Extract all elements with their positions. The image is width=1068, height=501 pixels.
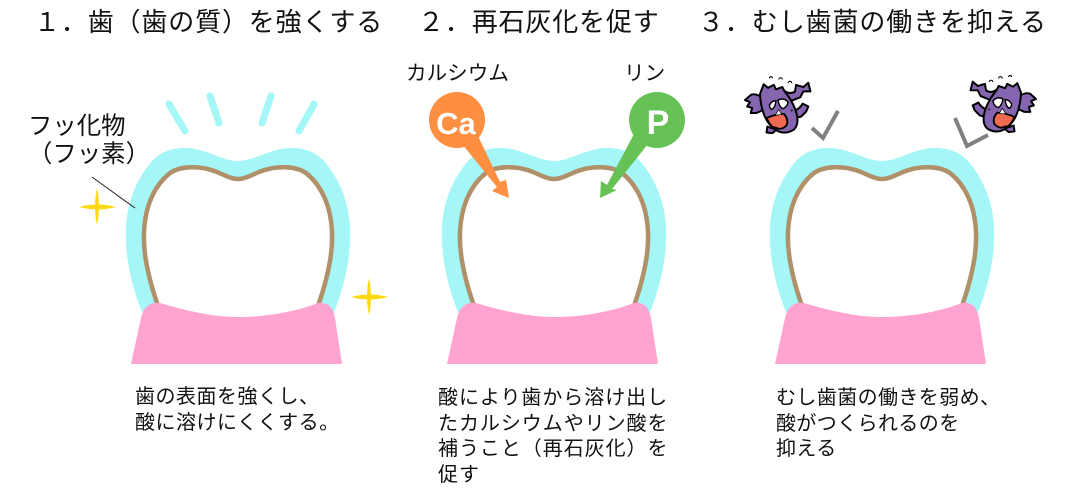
gum: [447, 303, 658, 364]
icon: cavity germ right: [971, 76, 1036, 132]
icon: check mark left: [812, 111, 838, 138]
text: step 2 description: たカルシウムやリン酸を: [438, 412, 668, 435]
icon: calcium arrow: Ca: [436, 106, 477, 141]
text: step 2 description: 酸により歯から溶け出し: [438, 386, 668, 409]
label: fluoride: フッ化物: [28, 113, 126, 140]
enamel coating: [770, 148, 994, 312]
panel: tooth 2: [442, 148, 666, 364]
panel: tooth 3: [770, 148, 994, 364]
text: step 3 description: むし歯菌の働きを弱め、: [776, 386, 1000, 409]
text: step 1 description: 歯の表面を強くし、: [135, 385, 320, 408]
text: step 2 description: 補うこと（再石灰化）を: [438, 437, 668, 460]
tooth dentin outline: [460, 167, 648, 306]
label: fluoride: [28, 113, 150, 168]
icon: sparkle right: [351, 278, 388, 315]
title: step 3: ３．むし歯菌の働きを抑える: [698, 7, 1047, 37]
tooth interior: [460, 167, 648, 325]
gum: [131, 303, 342, 364]
icon: sparkle left: [79, 188, 116, 225]
label: calcium: カルシウム: [406, 62, 509, 85]
tooth interior: [788, 167, 976, 325]
text: step 1 description: 酸に溶けにくくする。: [135, 411, 340, 434]
icon: phosphorus arrow: P: [647, 104, 669, 142]
tooth dentin outline: [788, 167, 976, 306]
text: step 3 description: 酸がつくられるのを: [776, 412, 960, 435]
title: step 2: ２．再石灰化を促す: [418, 7, 660, 37]
shine rays: [169, 96, 314, 131]
text: step 1 description: [135, 385, 340, 434]
enamel coating: [442, 148, 666, 312]
icon: check mark right: [955, 118, 988, 146]
tooth interior: [144, 167, 332, 325]
text: step 3 description: 抑える: [776, 437, 837, 460]
text: step 2 description: 促す: [438, 463, 480, 486]
icon: cavity germ left: [745, 77, 810, 133]
title: step 1: １．歯（歯の質）を強くする: [34, 7, 383, 37]
text: step 3 description: [776, 386, 1000, 460]
tooth dentin outline: [144, 167, 332, 306]
text: step 2 description: [438, 386, 668, 486]
label: phosphorus: リン: [624, 62, 665, 85]
panel: tooth 1: [126, 148, 350, 364]
label: fluoride: （フッ素）: [28, 141, 150, 168]
gum: [775, 303, 986, 364]
leader line: [92, 177, 135, 208]
icon: calcium arrow: [429, 92, 509, 198]
icon: phosphorus arrow: [600, 92, 685, 198]
fluoride coating: [126, 148, 350, 312]
